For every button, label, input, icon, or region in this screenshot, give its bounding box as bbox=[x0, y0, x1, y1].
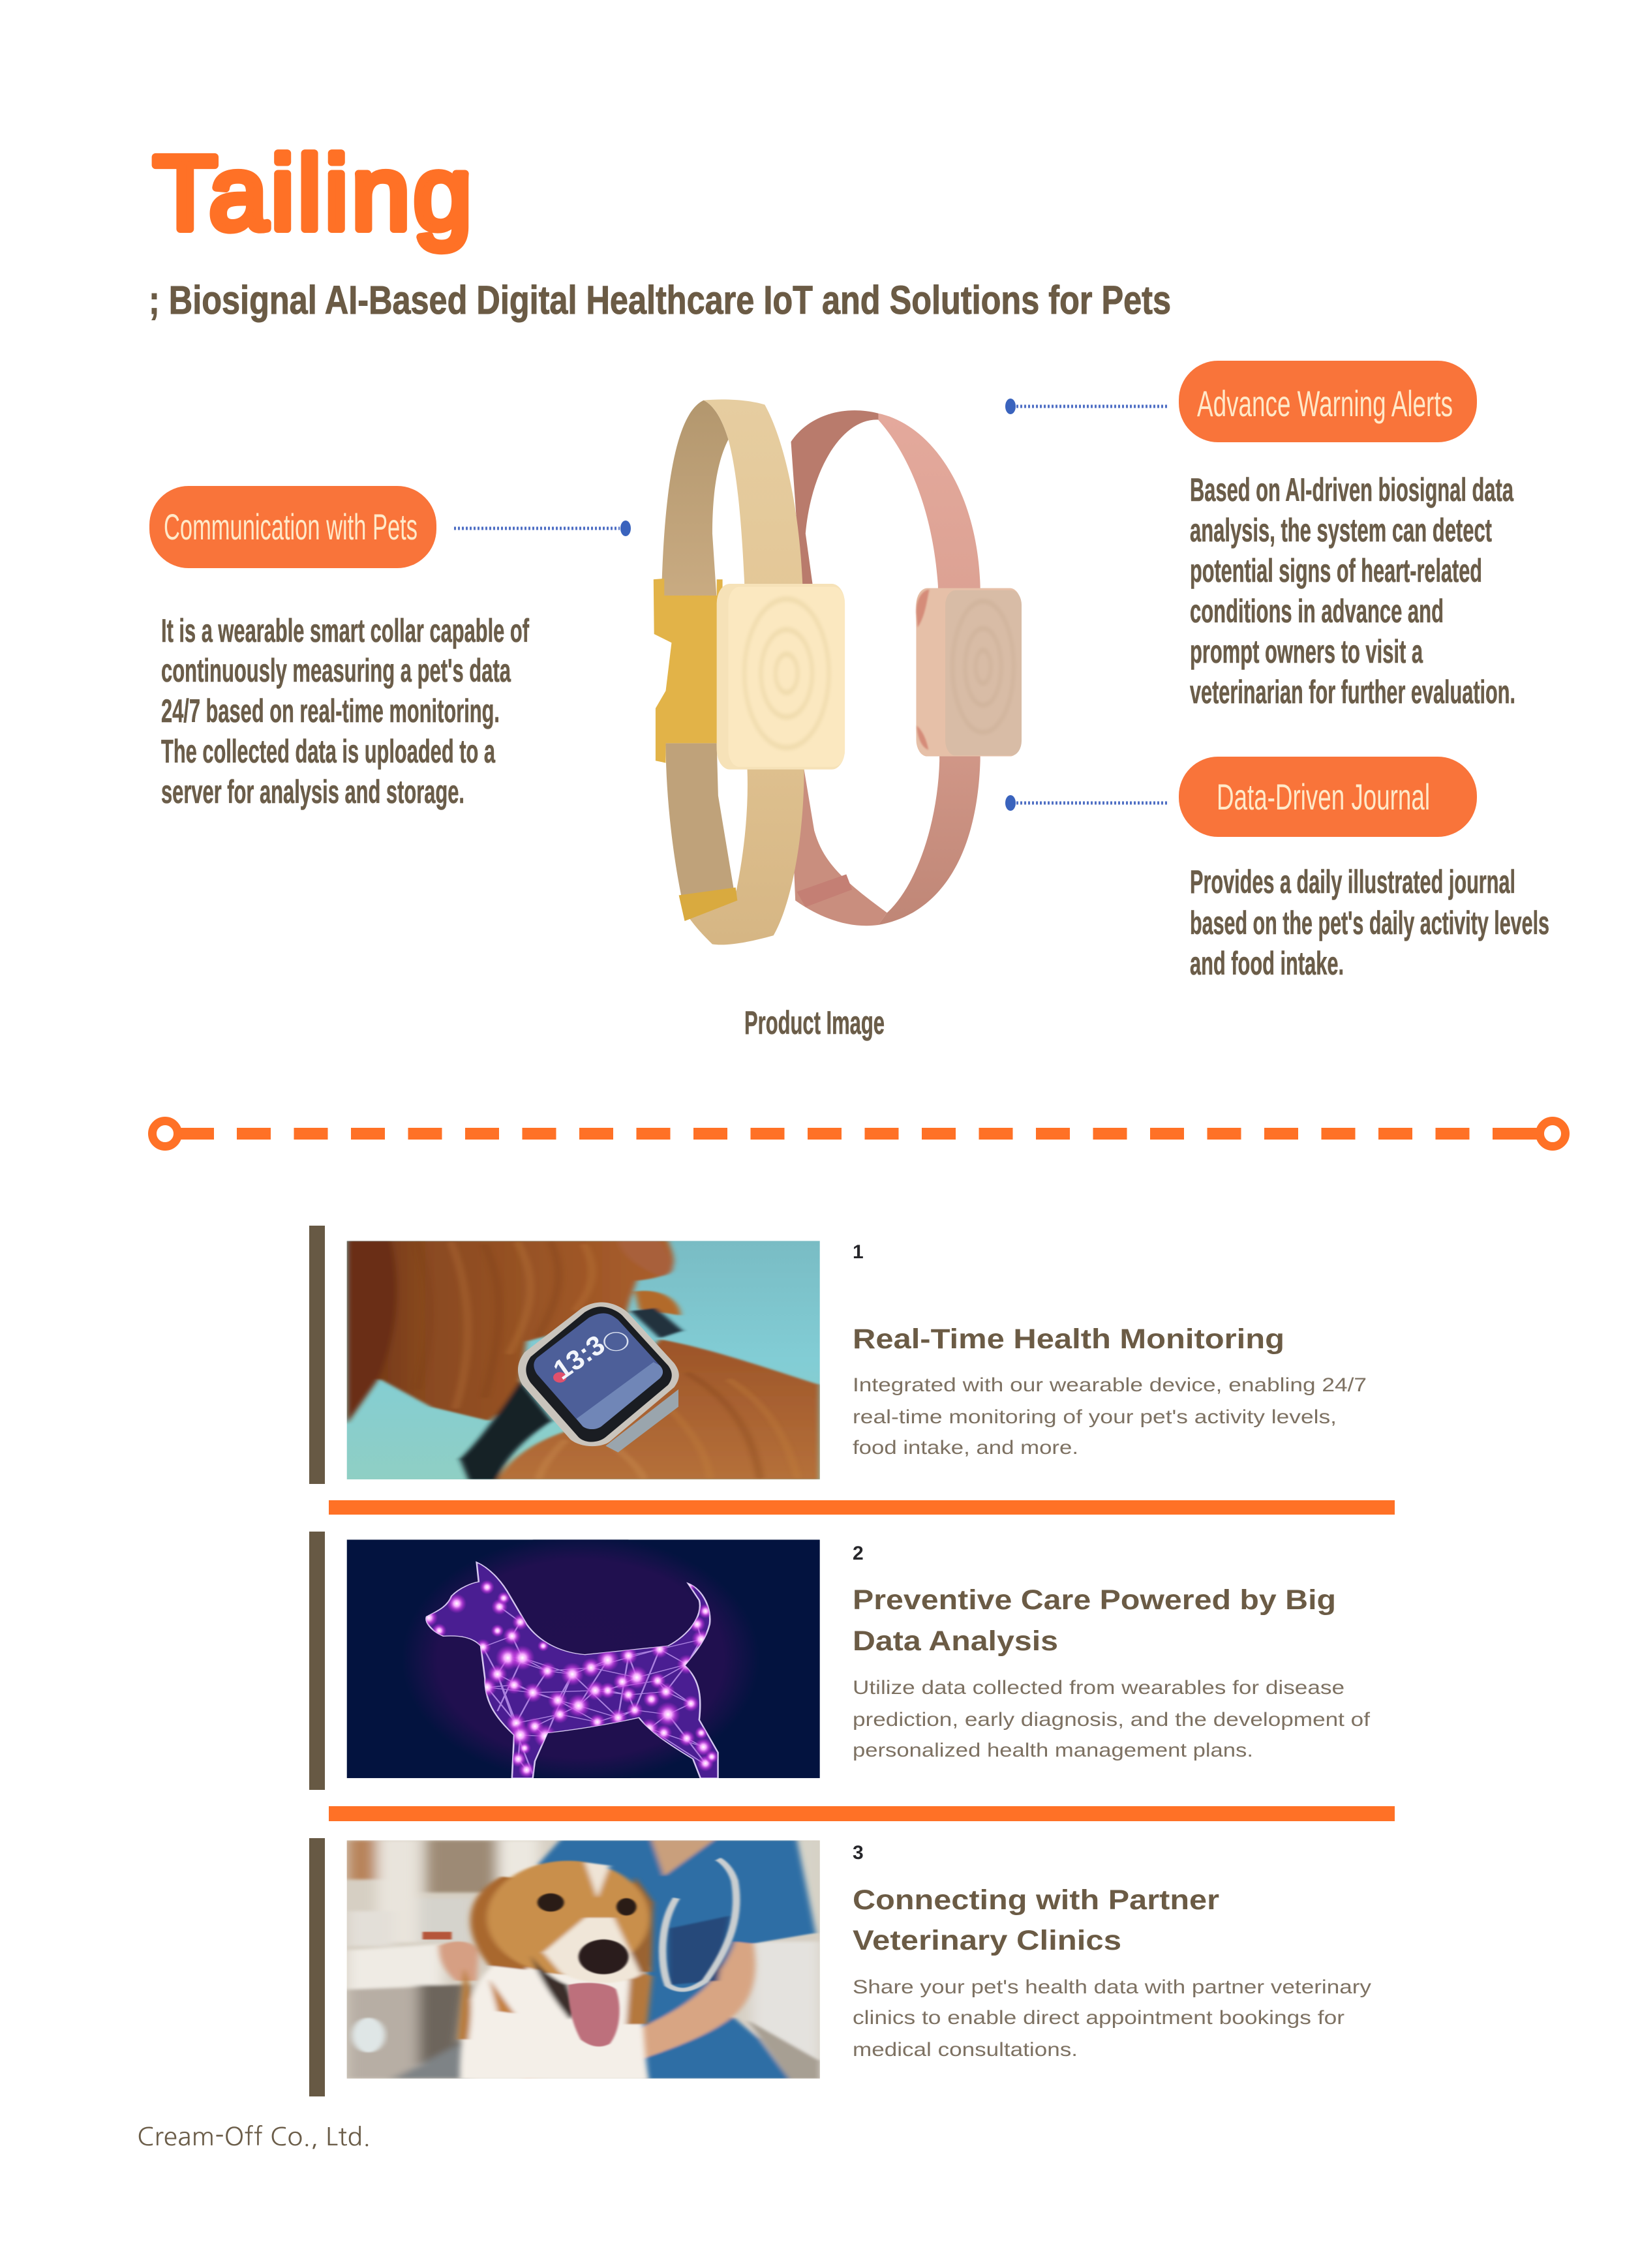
pink collar bbox=[791, 410, 1022, 926]
accent bar 2 bbox=[309, 1532, 325, 1790]
text block: Preventive Care: Utilize data collected from wearables for disease bbox=[853, 1677, 1344, 1699]
text block: Preventive Care: Data Analysis bbox=[853, 1625, 1058, 1657]
title: Tailing bbox=[153, 134, 472, 251]
tan collar bbox=[654, 399, 845, 945]
text block: Advance Warning Alerts: prompt owners to visit a bbox=[1190, 633, 1423, 670]
pill: Communication with Pets: Communication with Pets bbox=[164, 506, 418, 547]
footer: company name: Cream-Off Co., Ltd. bbox=[137, 2124, 371, 2149]
text block: Connecting with Partner: clinics to enable direct appointment bookings for bbox=[853, 2007, 1344, 2029]
text block: Preventive Care: personalized health management plans. bbox=[853, 1740, 1253, 1761]
text block: Real-Time Health Monitoring bbox=[853, 1241, 1367, 1459]
text block: Communication with Pets: 24/7 based on real-time monitoring. bbox=[161, 693, 500, 729]
product image: two smart collars bbox=[654, 399, 1022, 945]
text block: Connecting with Partner: Veterinary Clinics bbox=[853, 1925, 1121, 1956]
watch bbox=[518, 1302, 679, 1453]
connector: Advance Warning Alerts bbox=[1005, 399, 1168, 414]
text block: Data-Driven Journal: and food intake. bbox=[1190, 945, 1344, 982]
text block: Communication with Pets: It is a wearable smart collar capable of bbox=[161, 612, 529, 649]
text block: Connecting with Partner: Connecting with Partner bbox=[853, 1884, 1219, 1916]
caption: Product Image: Product Image bbox=[744, 1005, 885, 1041]
subtitle: ; Biosignal AI-Based Digital Healthcare IoT and Solutions for Pets bbox=[149, 278, 1171, 322]
text block: Real-Time Health Monitoring: food intake, and more. bbox=[853, 1437, 1078, 1459]
text block: Advance Warning Alerts: conditions in advance and bbox=[1190, 593, 1444, 629]
text block: Real-Time Health Monitoring: 1 bbox=[853, 1241, 864, 1263]
pill: Communication with Pets bbox=[149, 486, 436, 568]
text block: Preventive Care: Preventive Care Powered by Big bbox=[853, 1584, 1336, 1616]
pill: Data-Driven Journal bbox=[1179, 757, 1477, 837]
text block: Real-Time Health Monitoring: Real-Time Health Monitoring bbox=[853, 1323, 1284, 1355]
pill: Advance Warning Alerts: Advance Warning Alerts bbox=[1197, 383, 1453, 424]
text block: Connecting with Partner: 3 bbox=[853, 1842, 864, 1864]
text block: Connecting with Partner: medical consultations. bbox=[853, 2039, 1078, 2061]
pill: Advance Warning Alerts bbox=[1179, 361, 1477, 442]
image: dog with veterinarian bbox=[347, 1840, 820, 2079]
divider bar 1 bbox=[329, 1500, 1395, 1515]
text block: Communication with Pets: server for analysis and storage. bbox=[161, 774, 464, 810]
image: neural network dog bbox=[347, 1535, 820, 1783]
accent bar 1 bbox=[309, 1226, 325, 1484]
text block: Preventive Care: prediction, early diagnosis, and the development of bbox=[853, 1709, 1371, 1731]
pill: Data-Driven Journal: Data-Driven Journal bbox=[1217, 776, 1430, 817]
text block: Connecting with Partner: Share your pet's health data with partner veterinary bbox=[853, 1976, 1371, 1998]
text block: Preventive Care bbox=[853, 1543, 1371, 1761]
text block: Connecting with Partner bbox=[853, 1842, 1371, 2061]
text block: Preventive Care: 2 bbox=[853, 1543, 864, 1564]
scrubs bbox=[439, 1840, 820, 2079]
text block: Advance Warning Alerts bbox=[1190, 472, 1515, 710]
accent bar 3 bbox=[309, 1838, 325, 2096]
text block: Communication with Pets bbox=[161, 612, 529, 810]
watch: 13:3 bbox=[548, 1329, 610, 1385]
image: dog wearing smart watch collar bbox=[347, 1241, 820, 1479]
dog bbox=[458, 1861, 654, 2079]
dashed divider with end rings bbox=[153, 1121, 1566, 1147]
text block: Communication with Pets: The collected data is uploaded to a bbox=[161, 733, 496, 770]
text block: Real-Time Health Monitoring: Integrated with our wearable device, enabling 24/7 bbox=[853, 1374, 1367, 1396]
connector: Communication with Pets bbox=[454, 521, 631, 536]
text block: Data-Driven Journal bbox=[1190, 864, 1549, 982]
text block: Communication with Pets: continuously measuring a pet's data bbox=[161, 652, 511, 689]
text block: Real-Time Health Monitoring: real-time monitoring of your pet's activity levels, bbox=[853, 1406, 1337, 1428]
divider bar 2 bbox=[329, 1806, 1395, 1821]
connector: Data-Driven Journal bbox=[1005, 795, 1168, 811]
